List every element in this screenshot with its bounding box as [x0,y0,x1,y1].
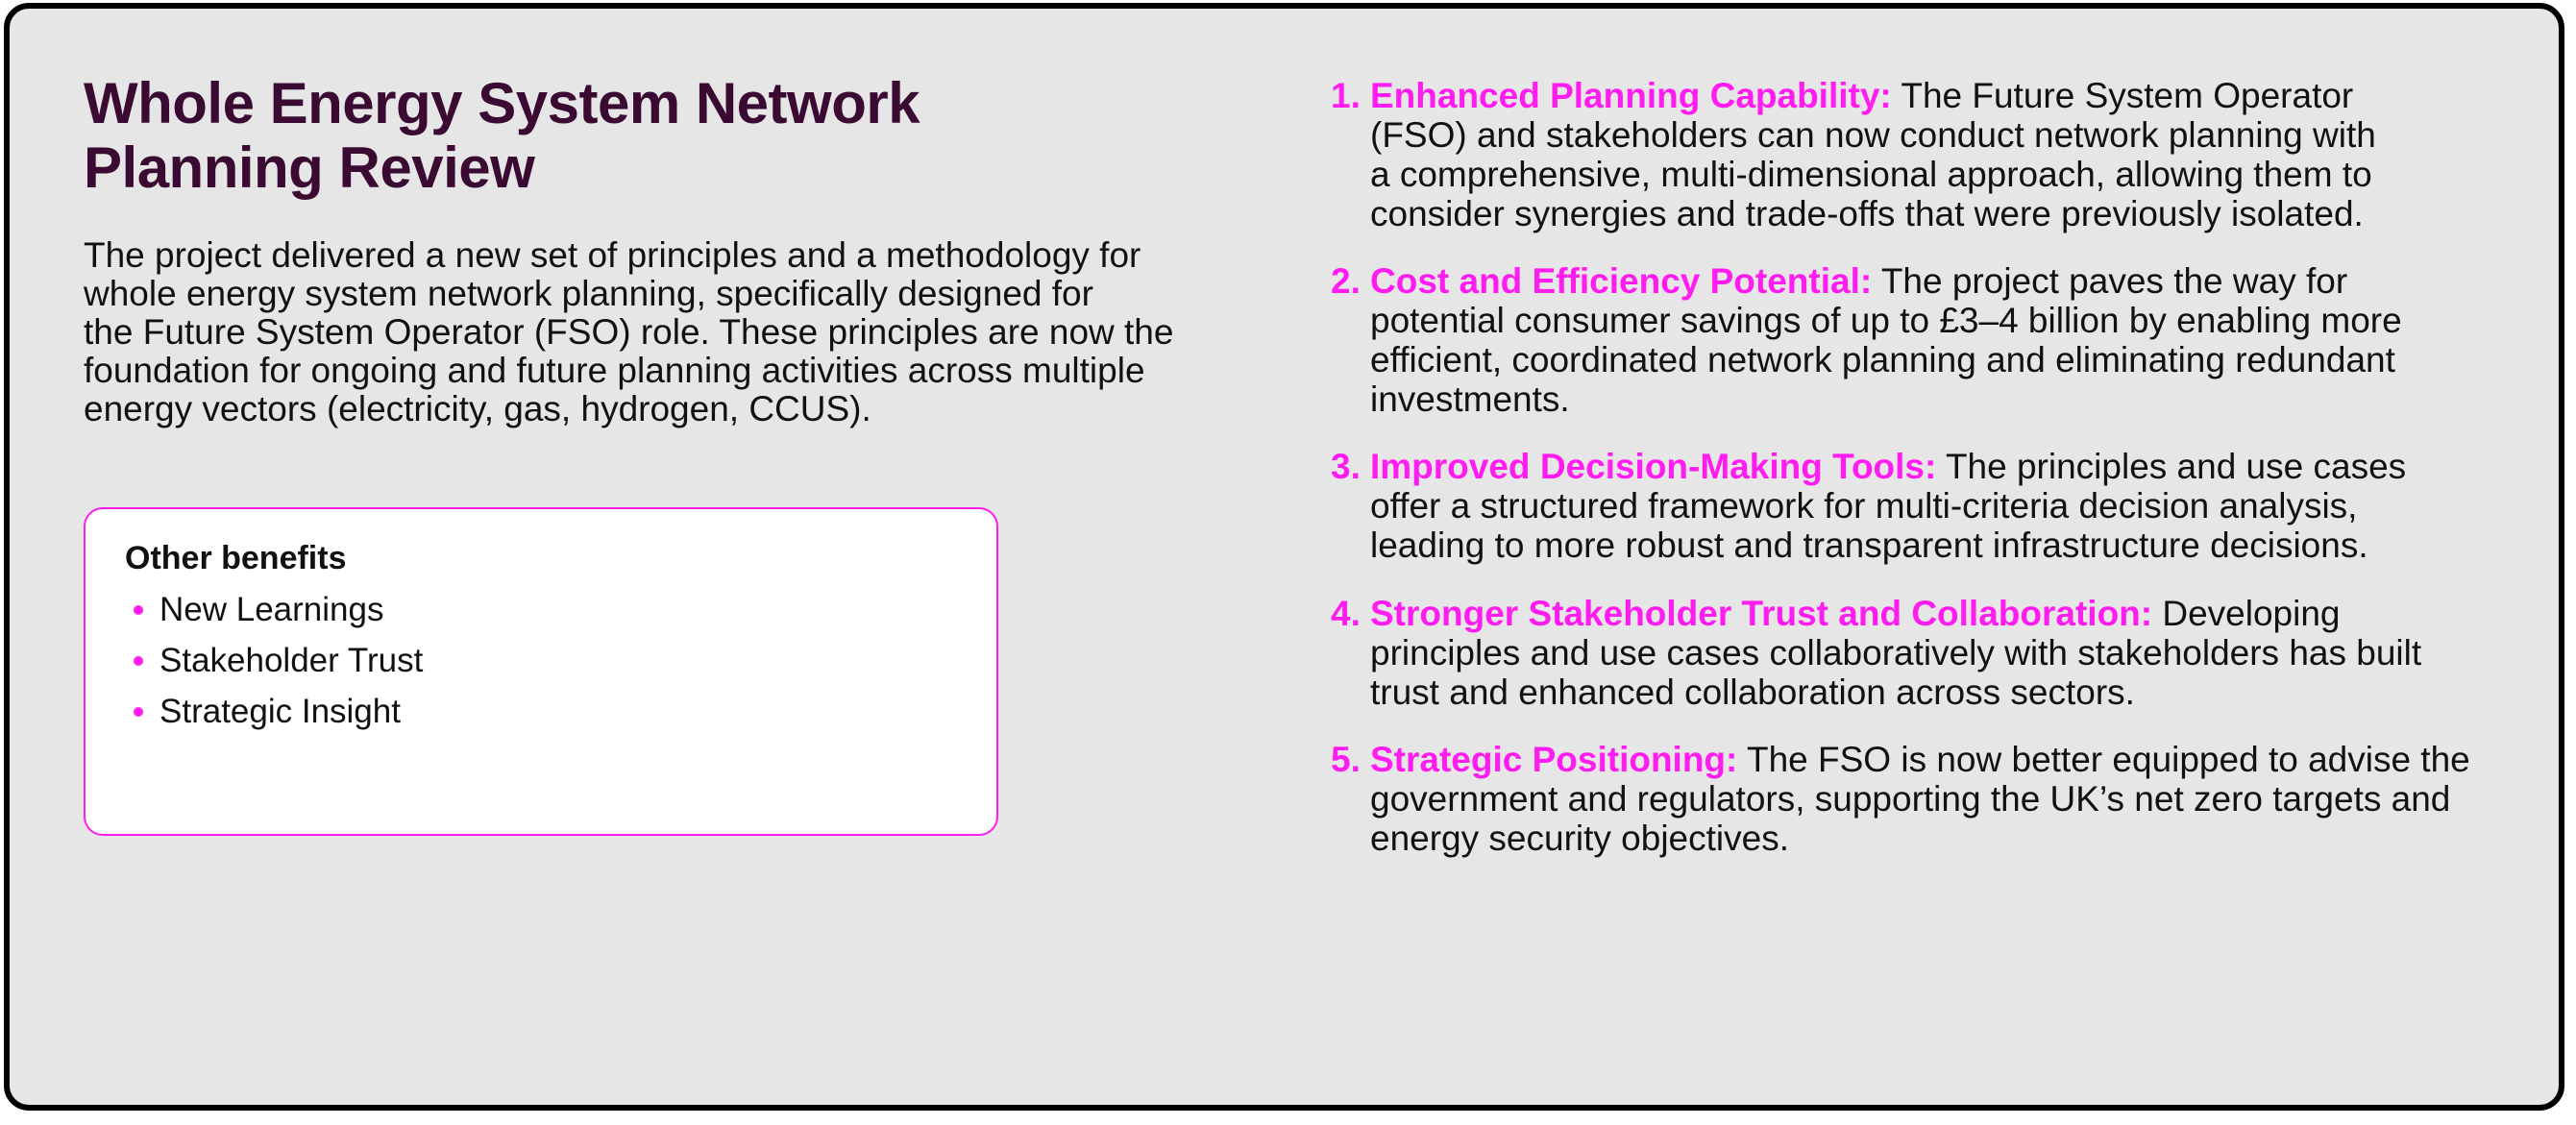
list item 4: 4. [1331,594,1361,633]
heading: other benefits: Other benefits [125,540,346,576]
list item 5: 5. [1331,740,1361,779]
bullet: strategic insight: Strategic Insight [159,693,401,730]
list item 1 [1331,76,2376,233]
title: Planning Review [84,135,534,200]
list item 5 [1331,740,2470,858]
list item 5: energy security objectives. [1370,819,1789,858]
bullet: new learnings: New Learnings [159,591,383,628]
list item 2 [1331,261,2402,419]
text block: intro paragraph: whole energy system network planning, specifically designed for [84,274,1093,313]
list item 1: 1. [1331,76,1361,115]
list item 3: Improved Decision-Making Tools: The principles and use cases [1370,447,2406,486]
text block: intro paragraph: foundation for ongoing and future planning activities across multiple [84,351,1145,390]
list item 2: efficient, coordinated network planning and eliminating redundant [1370,340,2395,379]
list item 2: Cost and Efficiency Potential: The project paves the way for [1370,261,2347,301]
list item 1: a comprehensive, multi-dimensional approach, allowing them to [1370,155,2372,194]
list item 4: trust and enhanced collaboration across sectors. [1370,673,2135,712]
title [84,71,920,200]
list item 2: potential consumer savings of up to £3–4 billion by enabling more [1370,301,2402,340]
text block: intro paragraph: The project delivered a new set of principles and a methodology for [84,235,1141,275]
panel: other benefits [84,507,998,836]
list item 1: consider synergies and trade-offs that were previously isolated. [1370,194,2364,233]
text block: intro paragraph [84,235,1173,428]
title: Whole Energy System Network [84,71,920,135]
list item 4: Stronger Stakeholder Trust and Collaboration: Developing [1370,594,2341,633]
list item 1: Enhanced Planning Capability: The Future System Operator [1370,76,2353,115]
list item 4: principles and use cases collaboratively with stakeholders has built [1370,633,2421,673]
list item 2: 2. [1331,261,1361,301]
list item 5: Strategic Positioning: The FSO is now better equipped to advise the [1370,740,2470,779]
list item 3: leading to more robust and transparent infrastructure decisions. [1370,526,2368,565]
list item 1: (FSO) and stakeholders can now conduct network planning with [1370,115,2376,155]
list item 2: investments. [1370,379,1570,419]
list item 5: government and regulators, supporting the UK’s net zero targets and [1370,779,2450,819]
text block: intro paragraph: energy vectors (electricity, gas, hydrogen, CCUS). [84,389,871,428]
list item 3 [1331,447,2406,565]
list item 4 [1331,594,2421,712]
list item 3: offer a structured framework for multi-criteria decision analysis, [1370,486,2357,526]
list item 3: 3. [1331,447,1361,486]
text block: intro paragraph: the Future System Operator (FSO) role. These principles are now the [84,312,1173,352]
bullet: stakeholder trust: Stakeholder Trust [159,642,423,679]
